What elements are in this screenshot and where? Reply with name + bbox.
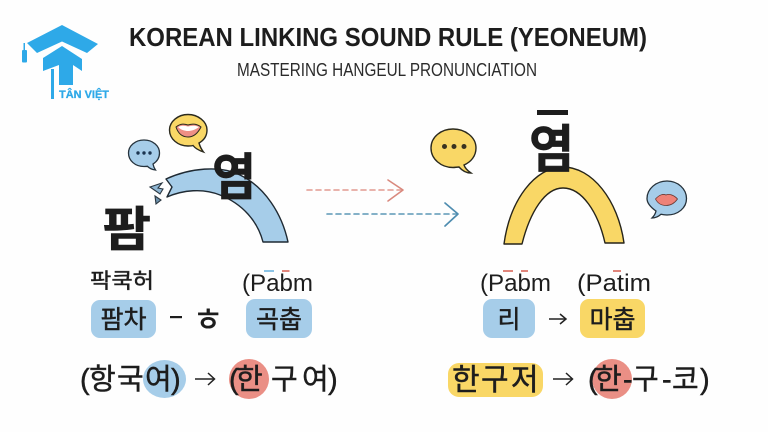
right label: romanization 1: (Pabm	[480, 270, 551, 297]
arrow: blue dashed	[327, 203, 458, 226]
arrow: bottom left	[195, 373, 214, 385]
bottom right result: (	[588, 364, 598, 396]
bottom right result: 한	[595, 364, 622, 396]
bottom right example: 구	[481, 364, 509, 397]
pill: yellow	[580, 299, 645, 338]
icon: yellow speech bubble with dots	[431, 129, 476, 173]
overline above syllable	[537, 110, 568, 115]
pill: blue left	[91, 300, 156, 338]
left label: romanization: (Pabm	[242, 270, 313, 297]
bottom right result: 구	[632, 364, 659, 396]
bottom right example: 저	[511, 364, 539, 397]
bottom left result	[229, 359, 338, 399]
icon: blue speech bubble with lips	[647, 181, 686, 218]
bottom right result	[588, 359, 710, 399]
bottom right result: -	[623, 364, 633, 396]
bottom right result: 코	[672, 364, 699, 396]
pill: blue left: 팜차	[100, 306, 147, 334]
arrow: red dashed	[307, 180, 403, 201]
bottom left example: 국	[117, 364, 144, 396]
bottom left result: )	[328, 364, 338, 396]
bottom left result: 구	[271, 364, 298, 396]
blue broken arc	[166, 169, 288, 242]
pill: blue	[483, 299, 535, 338]
logo: Tan Viet	[22, 25, 109, 101]
yellow arch	[504, 167, 624, 244]
bottom left example	[80, 360, 186, 398]
bottom left result: 한	[236, 364, 263, 396]
bottom left example: (	[80, 364, 90, 396]
bottom left example: )	[171, 364, 181, 396]
pill: blue: 리	[497, 306, 521, 334]
syllable on the arch: 염	[529, 109, 574, 183]
bottom right result: -	[662, 364, 672, 396]
bottom right example	[448, 363, 543, 397]
left label: Hangul: 팍쿡허	[90, 270, 154, 293]
icon: yellow speech bubble with mouth	[170, 114, 207, 152]
subtitle: MASTERING HANGEUL PRONUNCIATION	[237, 60, 537, 80]
jamo letter: ㅎ	[193, 301, 223, 338]
pill: blue right: 곡춥	[256, 306, 302, 334]
arrow: between pills	[549, 314, 566, 324]
bottom left example: 항	[89, 364, 116, 396]
syllable on the arc: 염	[212, 137, 256, 211]
icon: blue speech bubble with dots	[128, 140, 160, 170]
icon: broken shards	[150, 183, 163, 204]
bottom left example: 여	[145, 364, 172, 396]
bottom right example: 한	[452, 364, 480, 397]
right label: romanization 2: (Patim	[577, 270, 651, 297]
arrow: bottom right	[553, 373, 572, 385]
bottom left result: 여	[302, 364, 329, 396]
bottom right result: )	[700, 364, 710, 396]
title: KOREAN LINKING SOUND RULE (YEONEUM)	[129, 22, 647, 52]
operator dash	[170, 316, 182, 318]
logo: Tan Viet: TÂN VIỆT	[59, 88, 109, 101]
syllable at arc start: 팜	[102, 190, 151, 260]
pill: blue right	[246, 299, 312, 338]
pill: yellow: 마춥	[589, 306, 636, 334]
bottom left result: (	[229, 364, 239, 396]
